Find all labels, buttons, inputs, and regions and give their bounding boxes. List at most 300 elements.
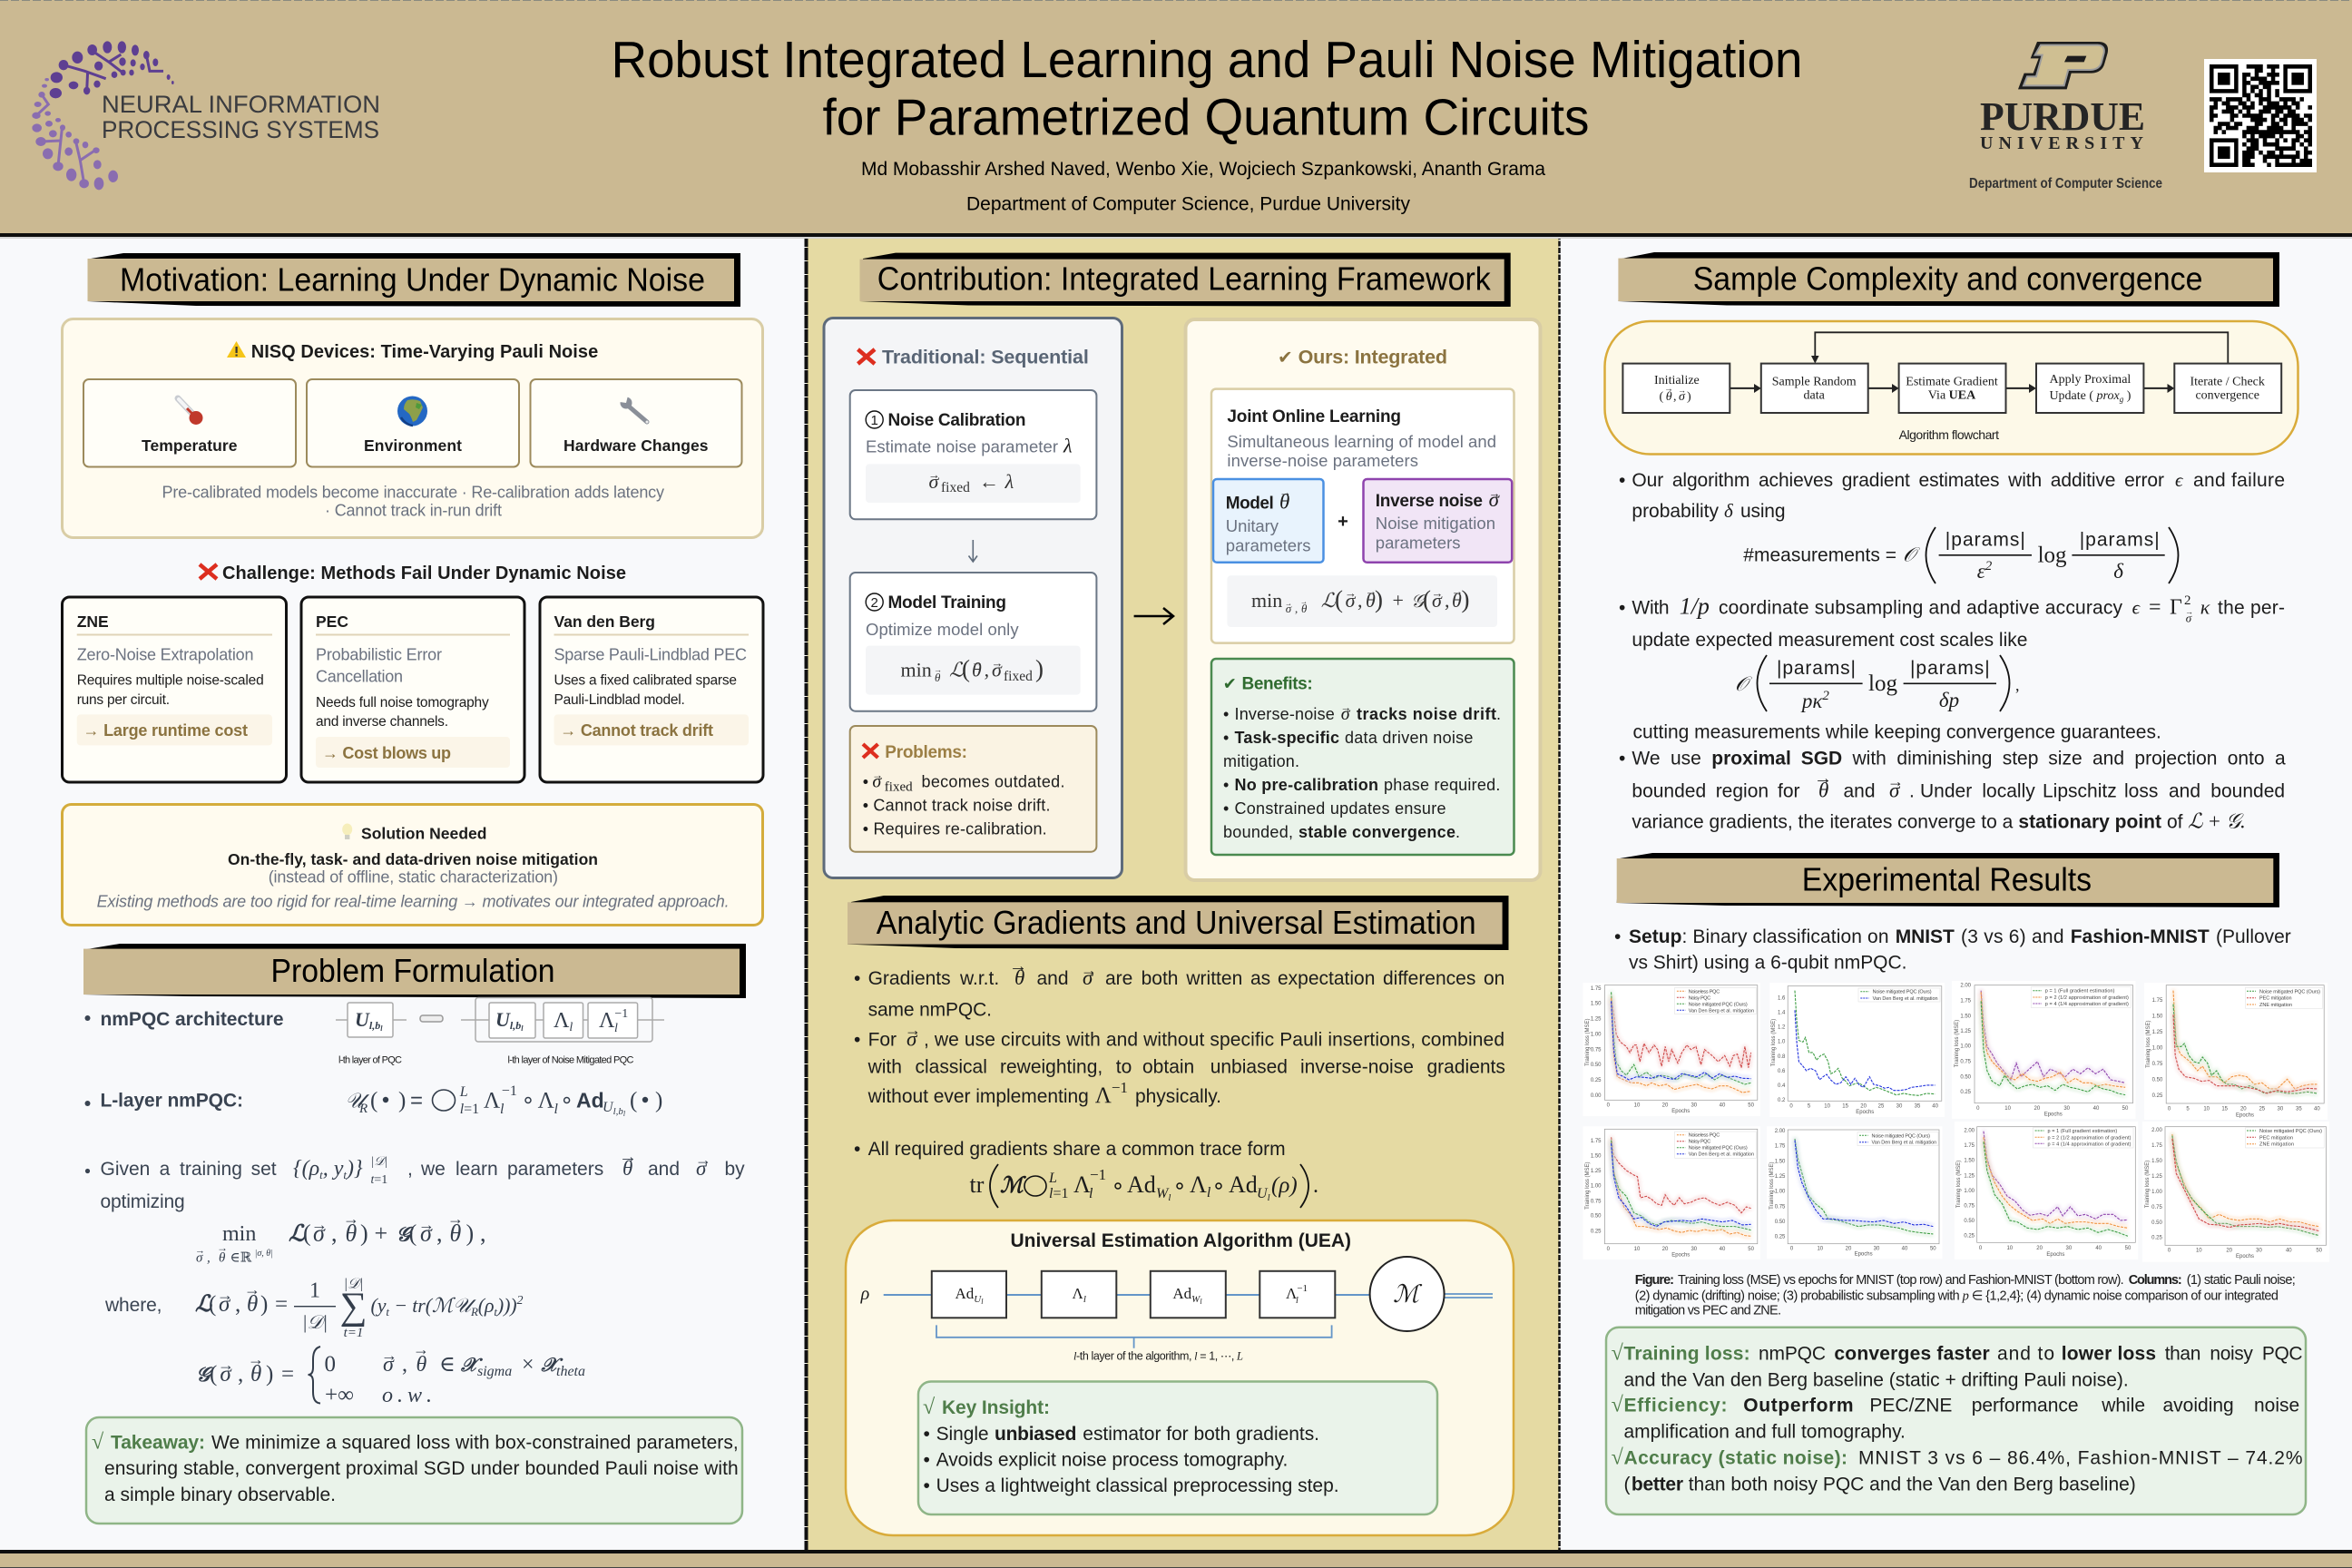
chart: MNIST static noise: 40 xyxy=(1720,1102,1726,1108)
step 2: model training: θ xyxy=(972,659,982,681)
callout: solution needed: Solution Needed xyxy=(361,825,486,843)
callout: takeaway: √ xyxy=(92,1430,104,1454)
chart: MNIST drifting noise: 5 xyxy=(1808,1104,1811,1110)
heading: Analytic Gradients xyxy=(848,896,1508,950)
callout: takeaway: ensuring stable, convergent proximal SGD under bounded Pauli noise with xyxy=(104,1458,739,1479)
step: proximal: g xyxy=(2120,395,2124,404)
heading: Experimental Results: Experimental Results xyxy=(1802,861,2092,898)
circuit diagram: UEA: U xyxy=(974,1294,982,1305)
text: proximal SGD: Under xyxy=(1920,780,1972,801)
figure caption: (2) dynamic (drifting) noise; (3) probabilistic subsampling with p ∈ {1,2,4}; (4) dynamic noise comparison of our integrated xyxy=(1635,1289,2278,1304)
text: training set: a xyxy=(160,1159,171,1180)
chart: MNIST static noise: 50 xyxy=(1748,1102,1755,1108)
callout: key insight: • xyxy=(924,1475,930,1496)
chart: MNIST static noise: 0.25 xyxy=(1591,1078,1602,1083)
chart: Fashion-MNIST comparison: 30 xyxy=(2256,1248,2262,1253)
circuit diagram: UEA: Ad xyxy=(1172,1285,1191,1302)
equation: loss definition: ( xyxy=(209,1292,216,1317)
callout: benefits: No pre-calibration xyxy=(1234,776,1378,794)
text: proximal SGD: a xyxy=(2275,749,2286,769)
chart: Fashion-MNIST subsampling: 30 xyxy=(2066,1246,2073,1251)
card: model: Unitary xyxy=(1226,516,1279,535)
summary: efficiency: PEC/ZNE xyxy=(1869,1396,1952,1416)
NISQ caption xyxy=(162,484,664,519)
equation: measurement cost: 𝒪 xyxy=(1735,672,1752,695)
equation: trace form: Ad xyxy=(1127,1171,1156,1198)
card: hardware changes xyxy=(530,379,742,466)
flowchart: algorithm: Algorithm flowchart xyxy=(1899,427,1999,442)
figure caption: Columns: xyxy=(2129,1273,2182,1288)
step 2: model training xyxy=(850,573,1096,711)
equation: L-layer unitary: −1 xyxy=(502,1083,517,1099)
callout: key insight: unbiased xyxy=(995,1424,1076,1445)
text: subsampling: coordinate subsampling and adaptive accuracy xyxy=(1719,597,2123,619)
chart: MNIST static noise: 1.75 xyxy=(1591,986,1602,992)
equation: trace form: tr xyxy=(969,1171,985,1198)
equation: loss definition xyxy=(104,1277,523,1340)
equation: optimization objective: |σ, θ| xyxy=(255,1249,273,1259)
chart: Fashion-MNIST drifting noise: 2.00 xyxy=(1775,1129,1786,1134)
summary: efficiency: noise xyxy=(2254,1396,2299,1416)
equation: trace form: l xyxy=(1268,1192,1270,1203)
chart: MNIST subsampling: p = 2 (1/2 approximation of gradient) xyxy=(2045,995,2129,1001)
step: sample xyxy=(1761,364,1868,413)
equation: measurement cost: δp xyxy=(1939,689,1959,711)
formula: joint objective: , xyxy=(1295,602,1298,615)
text: gradients: • xyxy=(854,968,860,989)
step 2: model training: σ xyxy=(992,659,1003,681)
circuit diagram: UEA xyxy=(860,1257,1493,1363)
callout: key insight: • xyxy=(924,1450,930,1470)
card: inverse noise: Inverse noise xyxy=(1376,492,1483,511)
text: proximal SGD: variance gradients, the iterates converge to a xyxy=(1632,812,2014,833)
text: gradients: written xyxy=(1185,968,1242,989)
chart: MNIST drifting noise: 40 xyxy=(1932,1104,1939,1110)
callout: benefits: • xyxy=(1223,776,1229,794)
card: model: → xyxy=(1279,485,1291,499)
equation: optimization objective: ℒ xyxy=(289,1221,306,1247)
summary: efficiency: Outperform xyxy=(1743,1396,1854,1416)
text: subsampling: • xyxy=(1619,597,1625,619)
text: proximal SGD: with xyxy=(1851,749,1886,769)
equation: regularizer definition: 𝒳 xyxy=(460,1354,484,1376)
chart: MNIST comparison: Epochs xyxy=(2236,1112,2254,1118)
callout: benefits: mitigation. xyxy=(1223,752,1299,770)
equation: optimization objective: ( xyxy=(303,1220,311,1247)
equation: regularizer definition: θ xyxy=(250,1362,261,1387)
chart: MNIST subsampling: 1.50 xyxy=(1960,1014,1972,1019)
text: setup: (3 vs 6) and xyxy=(1961,926,2063,947)
text: subsampling: σ xyxy=(2186,611,2192,624)
text: gradients: w.r.t. xyxy=(959,968,999,989)
text: proximal SGD: . xyxy=(1909,780,1915,801)
callout: key insight: • xyxy=(924,1424,930,1445)
text: gradients xyxy=(854,956,1505,1160)
chart: MNIST subsampling: 1.75 xyxy=(1960,998,1972,1004)
text: gradients: For xyxy=(868,1030,897,1051)
equation: loss definition: ∑ xyxy=(340,1286,367,1328)
NISQ caption: · Cannot track in-run drift xyxy=(325,501,502,519)
text: training set: )} xyxy=(345,1157,363,1181)
step 2: model training: ℒ xyxy=(949,659,965,681)
chart: Fashion-MNIST static noise: 0.75 xyxy=(1591,1199,1602,1204)
text: training set: t xyxy=(343,1168,347,1181)
text: proximal SGD: → xyxy=(1814,769,1832,789)
text: proximal SGD: onto xyxy=(2228,749,2265,769)
text: gradients: both xyxy=(1142,968,1178,989)
callout: benefits: . xyxy=(1496,705,1501,723)
card: ZNE: Zero-Noise Extrapolation xyxy=(77,646,254,664)
chart: MNIST drifting noise: 1.0 xyxy=(1778,1040,1786,1045)
figure caption xyxy=(1635,1273,2296,1318)
text: gradients: expectation xyxy=(1278,968,1375,989)
summary: training loss: than noisy PQC xyxy=(2165,1343,2303,1364)
text: subsampling: → xyxy=(2185,607,2193,616)
equation: loss definition: → xyxy=(244,1280,260,1298)
panel: ours integrated xyxy=(1185,319,1541,880)
step: iterate: Iterate / Check xyxy=(2190,376,2265,389)
circuit diagram: UEA: −1 xyxy=(1297,1283,1308,1294)
chart: Fashion-MNIST drifting noise: 1.00 xyxy=(1775,1190,1786,1195)
chart: Fashion-MNIST comparison: PEC mitigation xyxy=(2259,1135,2293,1141)
equation: trace form: U xyxy=(1257,1186,1268,1201)
chart: Fashion-MNIST subsampling: 2.00 xyxy=(1964,1129,1975,1134)
chart: Fashion-MNIST static noise xyxy=(1583,1126,1760,1259)
equation: regularizer definition: ) xyxy=(266,1362,273,1387)
equation: measurement cost: |params| xyxy=(1777,658,1856,679)
callout: benefits: bounded, xyxy=(1223,823,1293,841)
equation: measurements: 2 xyxy=(1985,559,1993,573)
NISQ caption: Pre-calibrated models become inaccurate · Re-calibration adds latency xyxy=(162,484,664,502)
step 1: noise calibration: ← xyxy=(979,470,999,493)
equation: optimization objective xyxy=(195,1210,486,1266)
step 2: model training: ) xyxy=(1035,655,1044,682)
equation: measurements: |params| xyxy=(2080,530,2160,550)
chart: Fashion-MNIST static noise: Van Den Berg et al. mitigation xyxy=(1689,1152,1754,1158)
chart: Fashion-MNIST drifting noise: 0.50 xyxy=(1775,1220,1786,1225)
text: training set: parameters xyxy=(507,1159,603,1180)
chart: Fashion-MNIST comparison: 2.00 xyxy=(2151,1128,2162,1133)
equation: regularizer definition xyxy=(196,1340,585,1407)
chart: MNIST drifting noise: 1.2 xyxy=(1778,1025,1786,1031)
icon: light bulb xyxy=(342,824,352,839)
chart: MNIST drifting noise: 0.4 xyxy=(1778,1083,1786,1089)
heading: Contribution xyxy=(860,253,1511,307)
text: setup: vs Shirt) using a 6-qubit nmPQC. xyxy=(1629,952,1907,973)
text: proximal SGD: locally xyxy=(1982,780,2035,801)
equation: regularizer definition: , xyxy=(238,1362,243,1387)
heading: Motivation xyxy=(87,253,740,307)
step 2: model training: → xyxy=(971,655,984,669)
step: proximal: Apply Proximal xyxy=(2049,373,2131,387)
figure caption: (1) static Pauli noise; xyxy=(2187,1273,2296,1288)
chart: MNIST static noise: 30 xyxy=(1690,1102,1698,1108)
text: training set: learn xyxy=(456,1159,498,1180)
equation: trace form: . xyxy=(1313,1174,1318,1198)
chart: MNIST drifting noise: Noise mitigated PQC (Ours) xyxy=(1873,990,1932,995)
formula: joint objective: ( xyxy=(1423,586,1431,613)
chart: MNIST comparison: 0.50 xyxy=(2152,1078,2163,1083)
text: training set: by xyxy=(724,1159,745,1180)
equation: optimization objective: ( xyxy=(409,1220,416,1247)
callout: key insight: Avoids explicit noise process tomography. xyxy=(936,1450,1288,1470)
chart: MNIST drifting noise: 20 xyxy=(1860,1104,1867,1110)
text: training set: σ xyxy=(696,1157,708,1180)
summary: efficiency: √ xyxy=(1612,1394,1624,1417)
card: PEC: Probabilistic Error xyxy=(316,646,442,664)
circuit: nmPQC layer: −1 xyxy=(614,1007,628,1021)
step: initialize: σ xyxy=(1679,390,1686,404)
chart: MNIST comparison: 1.25 xyxy=(2152,1030,2163,1035)
chart: MNIST comparison: 0.25 xyxy=(2152,1093,2163,1099)
chart: Fashion-MNIST comparison: 10 xyxy=(2196,1248,2202,1253)
formula: joint objective: ( xyxy=(1335,586,1343,613)
panel: experimental results xyxy=(1583,853,2329,1514)
callout: solution needed: On-the-fly, task- and data-driven noise mitigation xyxy=(228,850,598,868)
text: training set: θ xyxy=(622,1157,632,1180)
step 1: noise calibration: → xyxy=(928,468,940,481)
text: subsampling: = xyxy=(2149,595,2161,619)
traditional heading: Traditional: Sequential xyxy=(882,347,1089,368)
card: PEC: Cancellation xyxy=(316,668,403,686)
text: proximal SGD: step xyxy=(2003,749,2038,769)
card: ZNE: ZNE xyxy=(77,612,109,631)
text: setup xyxy=(1614,926,2291,973)
chart: MNIST comparison: 40 xyxy=(2314,1107,2320,1112)
chart: MNIST static noise: 1.25 xyxy=(1591,1017,1602,1023)
panel: universal estimation algorithm xyxy=(846,1220,1514,1535)
step 2: model training: θ xyxy=(935,671,941,684)
circuit diagram: UEA: l xyxy=(1200,1298,1202,1306)
text: gradients: to xyxy=(1116,1056,1132,1077)
formula: joint objective xyxy=(1227,575,1497,627)
callout: solution needed: Existing methods are too rigid for real-time learning → motivates our integrated approach. xyxy=(97,892,730,910)
joint online learning xyxy=(1211,389,1514,643)
equation: regularizer definition: → xyxy=(413,1340,429,1358)
circuit diagram: UEA: Ad xyxy=(955,1285,974,1302)
text: gradients: on xyxy=(1484,968,1504,989)
chart: MNIST drifting noise: 15 xyxy=(1842,1104,1849,1110)
summary: training loss: and to xyxy=(1997,1343,2054,1364)
chart: MNIST static noise: Noise mitigated PQC (Ours) xyxy=(1689,1002,1748,1007)
circuit: nmPQC layer: l xyxy=(380,1024,383,1033)
callout: problems: becomes outdated. xyxy=(922,773,1065,791)
chart: MNIST subsampling: 50 xyxy=(2122,1106,2129,1112)
circuit: nmPQC layer: l,b xyxy=(510,1019,521,1032)
chart: MNIST drifting noise: 1.4 xyxy=(1778,1011,1786,1016)
chart: Fashion-MNIST drifting noise: 50 xyxy=(1930,1247,1936,1252)
chart: MNIST subsampling: p = 4 (1/4 approximation of gradient) xyxy=(2045,1002,2129,1007)
equation: trace form: L xyxy=(1048,1171,1057,1186)
chart: MNIST static noise: Noiseless PQC xyxy=(1689,989,1720,995)
equation: optimization objective: σ xyxy=(196,1251,203,1266)
step 2: model training: Optimize model only xyxy=(866,620,1019,639)
card: ZNE: runs per circuit. xyxy=(77,692,170,708)
chart: Fashion-MNIST comparison: 50 xyxy=(2316,1248,2323,1253)
chart: MNIST drifting noise: 10 xyxy=(1824,1104,1831,1110)
equation: optimization objective: σ xyxy=(420,1220,433,1247)
chart: Fashion-MNIST subsampling: 1.50 xyxy=(1964,1159,1975,1164)
step: sample: Sample Random xyxy=(1772,376,1857,389)
chart: Fashion-MNIST drifting noise: 0.75 xyxy=(1775,1204,1786,1210)
plus sign: + xyxy=(1338,512,1348,532)
card: model: parameters xyxy=(1226,535,1310,554)
text: gradients: unbiased xyxy=(1210,1056,1288,1077)
chart: MNIST drifting noise: 30 xyxy=(1896,1104,1903,1110)
step: initialize: → xyxy=(1664,385,1673,394)
equation: optimization objective: ) xyxy=(466,1220,474,1247)
chart: MNIST subsampling: Epochs xyxy=(2044,1112,2063,1117)
QR code xyxy=(2204,59,2317,172)
circuit diagram: UEA: ρ xyxy=(860,1284,869,1304)
equation: optimization objective: → xyxy=(195,1245,205,1256)
title: for Parametrized Quantum Circuits xyxy=(822,89,1590,147)
formula: joint objective: θ xyxy=(1452,589,1462,612)
chart: Fashion-MNIST comparison: 1.50 xyxy=(2151,1159,2162,1164)
text: subsampling: κ xyxy=(2200,595,2210,619)
formula: joint objective: ) xyxy=(1375,586,1383,613)
text: gradients: All required gradients share a common trace form xyxy=(868,1139,1286,1160)
step 2: model training: , xyxy=(985,659,989,681)
title xyxy=(612,31,1802,147)
card: model xyxy=(1213,479,1323,563)
heading: Sample Complexity xyxy=(1618,252,2279,307)
text: subsampling xyxy=(1619,593,2285,651)
text: gradient estimates: δ xyxy=(1724,500,1734,522)
equation: optimization objective: θ xyxy=(345,1220,358,1247)
chart: MNIST subsampling: p = 1 (Full gradient estimation) xyxy=(2045,989,2115,995)
text: proximal SGD: Lipschitz xyxy=(2043,780,2117,801)
equation: optimization objective: + xyxy=(374,1220,387,1247)
chart: Fashion-MNIST static noise: 20 xyxy=(1662,1247,1669,1252)
callout: key insight xyxy=(918,1381,1437,1514)
chart: Fashion-MNIST subsampling: 0.25 xyxy=(1964,1234,1975,1240)
chart: Fashion-MNIST subsampling: Epochs xyxy=(2046,1252,2064,1258)
equation: trace form: Λ xyxy=(1073,1171,1091,1198)
text: setup: (Pullover xyxy=(2216,926,2291,947)
callout: benefits: • xyxy=(1223,705,1229,723)
step: iterate: convergence xyxy=(2195,388,2259,403)
chart: Fashion-MNIST drifting noise: 20 xyxy=(1846,1247,1852,1252)
chart: Fashion-MNIST subsampling: 1.75 xyxy=(1964,1143,1975,1149)
text: gradient estimates: ϵ xyxy=(2175,469,2184,491)
heading: Motivation: Motivation: Learning Under Dynamic Noise xyxy=(120,261,705,299)
step: initialize: ) xyxy=(1687,390,1691,404)
step: initialize: θ xyxy=(1666,390,1672,404)
summary: efficiency xyxy=(1612,1394,2299,1443)
chart: MNIST static noise: Training loss (MSE) xyxy=(1585,1018,1591,1066)
chart: Fashion-MNIST static noise: Noiseless PQC xyxy=(1689,1133,1720,1139)
nmPQC architecture label: nmPQC architecture xyxy=(100,1009,283,1030)
equation: loss definition: ))) xyxy=(495,1294,517,1317)
step 2: model training: → xyxy=(991,656,1004,670)
callout: benefits: ✔ xyxy=(1223,675,1237,693)
step: proximal: Update ( prox xyxy=(2049,389,2120,403)
callout: benefits: phase required. xyxy=(1384,776,1500,794)
chart: MNIST comparison: 35 xyxy=(2296,1107,2302,1112)
text: proximal SGD: stationary point xyxy=(2018,812,2161,833)
text: gradients: • xyxy=(854,1139,860,1160)
summary: accuracy: MNIST 3 vs 6 – 86.4%, Fashion-MNIST – 74.2% xyxy=(1858,1447,2303,1468)
formula: joint objective: 𝒢 xyxy=(1411,592,1427,612)
equation: measurement cost: pκ xyxy=(1802,690,1822,712)
circuit diagram: UEA: ℳ xyxy=(1393,1280,1423,1308)
chart: Fashion-MNIST static noise: Noisy PQC xyxy=(1689,1140,1710,1145)
equation: L-layer unitary: ) xyxy=(655,1089,662,1112)
chart: MNIST subsampling: 10 xyxy=(2004,1106,2012,1112)
equation: measurement cost: 2 xyxy=(1822,689,1829,703)
chart: Fashion-MNIST comparison: 0.50 xyxy=(2151,1220,2162,1226)
chart: MNIST static noise: 1.00 xyxy=(1591,1032,1602,1037)
equation: loss definition: (ρ xyxy=(478,1294,495,1317)
text: proximal SGD: SGD xyxy=(1801,749,1842,769)
circuit: nmPQC layer: l xyxy=(569,1021,573,1034)
equation: regularizer definition: sigma xyxy=(477,1364,512,1379)
chart: MNIST static noise: 0.00 xyxy=(1591,1093,1602,1099)
chart: MNIST subsampling: 0.50 xyxy=(1960,1074,1972,1080)
chart: Fashion-MNIST drifting noise xyxy=(1767,1126,1942,1259)
chart: MNIST subsampling: 30 xyxy=(2063,1106,2071,1112)
text: training set: training xyxy=(180,1159,242,1180)
chart: Fashion-MNIST drifting noise: 1.50 xyxy=(1775,1159,1786,1164)
equation: optimization objective: θ xyxy=(450,1220,461,1247)
step 1: noise calibration: 1 xyxy=(871,413,878,428)
card: temperature xyxy=(83,379,296,466)
chart: MNIST static noise: 10 xyxy=(1634,1102,1641,1108)
figure caption: mitigation vs PEC and ZNE. xyxy=(1635,1303,1781,1318)
step: proximal xyxy=(2036,364,2143,413)
text: setup: : Binary classification on xyxy=(1682,926,1889,947)
equation: loss definition: 1 xyxy=(309,1279,320,1302)
joint online learning: Joint Online Learning xyxy=(1227,407,1401,426)
equation: measurements: #measurements = xyxy=(1743,544,1896,566)
circuit diagram: UEA: W xyxy=(1191,1294,1200,1305)
card: inverse noise: Noise mitigation xyxy=(1376,514,1495,533)
summary: accuracy: better xyxy=(1632,1474,1683,1494)
card: PEC xyxy=(301,597,524,782)
step 1: noise calibration xyxy=(850,390,1096,519)
chart: MNIST drifting noise: Epochs xyxy=(1856,1110,1874,1115)
chart: MNIST comparison: 20 xyxy=(2240,1107,2247,1112)
callout: benefits: • xyxy=(1223,799,1229,818)
step 1: noise calibration: λ xyxy=(1063,434,1073,456)
text: gradients: −1 xyxy=(1112,1079,1128,1096)
heading: Problem Formulation: Problem Formulation xyxy=(270,952,555,989)
chart: MNIST comparison: 0 xyxy=(2168,1107,2171,1112)
equation: measurements xyxy=(1743,527,2178,583)
formula: joint objective: → xyxy=(1365,584,1377,598)
equation: L-layer unitary xyxy=(345,1083,662,1118)
step: proximal: ) xyxy=(2123,389,2132,403)
summary: efficiency: Efficiency: xyxy=(1624,1396,1728,1416)
chart: Fashion-MNIST static noise: Epochs xyxy=(1671,1252,1690,1258)
callout: solution needed xyxy=(62,804,762,926)
chart: MNIST subsampling: 0.75 xyxy=(1960,1060,1972,1065)
equation: measurement cost: |params| xyxy=(1910,658,1990,679)
text: gradients: • xyxy=(854,1030,860,1051)
summary: training loss: converges faster xyxy=(1834,1343,1990,1364)
text: training set: Given xyxy=(100,1159,150,1180)
figure caption: Figure: xyxy=(1635,1273,1674,1288)
text: training set: set xyxy=(251,1159,277,1180)
text: training set: optimizing xyxy=(100,1191,185,1212)
chart: MNIST comparison: 1.00 xyxy=(2152,1046,2163,1052)
equation: optimization objective: → xyxy=(217,1241,228,1254)
formula: joint objective: σ xyxy=(1346,589,1357,612)
callout: benefits: data driven noise xyxy=(1345,729,1473,747)
card: environment: Environment xyxy=(364,436,462,455)
callout: results summary xyxy=(1606,1328,2306,1514)
